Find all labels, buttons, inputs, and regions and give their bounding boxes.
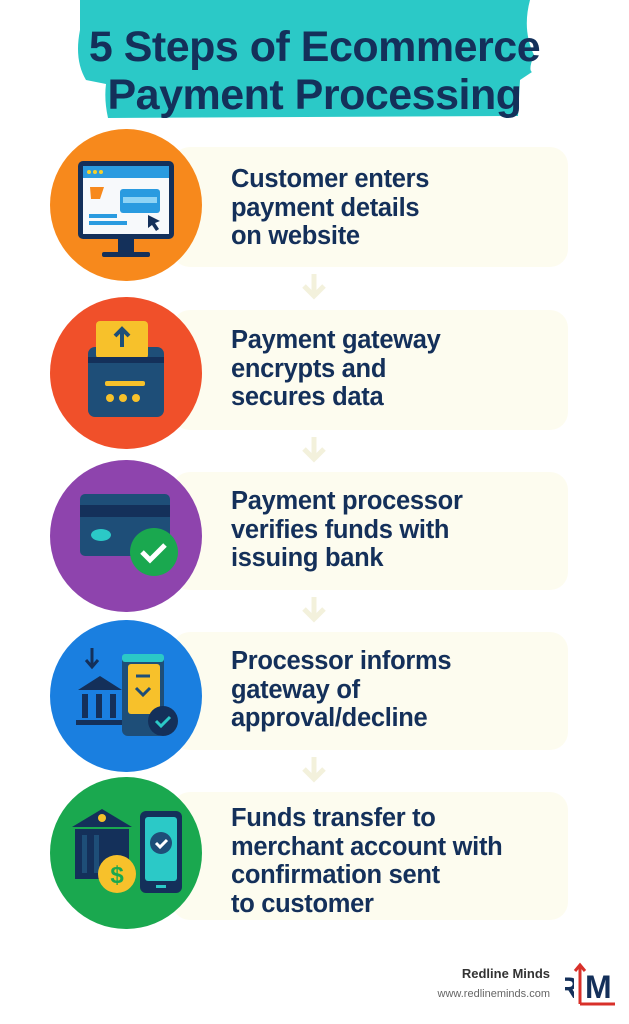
step 2 text xyxy=(231,326,441,411)
arrow 2 xyxy=(302,437,326,462)
step 2 text: encrypts and xyxy=(231,354,386,382)
step 3 text xyxy=(231,487,463,572)
step 1 text: on website xyxy=(231,222,360,250)
step 5 text: merchant account with xyxy=(231,832,502,860)
step 3 card xyxy=(172,472,568,590)
step 5 text: confirmation sent xyxy=(231,861,440,889)
step 4 text: Processor informs xyxy=(231,647,451,675)
icon: computer (step 1) xyxy=(50,129,202,281)
title banner xyxy=(78,0,540,119)
title banner: 5 Steps of Ecommerce xyxy=(89,23,540,71)
icon: card with check (step 3) xyxy=(50,460,202,612)
step 1 text xyxy=(231,165,429,250)
logo: M xyxy=(585,969,612,1005)
step 4 text: gateway of xyxy=(231,676,360,704)
icon: bank coin phone (step 5): $ xyxy=(110,862,124,889)
step 5 text: Funds transfer to xyxy=(231,804,436,832)
step 2 text: secures data xyxy=(231,383,383,411)
step 3 text: issuing bank xyxy=(231,544,383,572)
icon: bank coin phone (step 5) xyxy=(50,777,202,929)
arrow 3 xyxy=(302,597,326,622)
step 3 text: verifies funds with xyxy=(231,516,449,544)
step 5 text xyxy=(231,804,502,918)
footer brand: www.redlineminds.com xyxy=(438,988,550,1000)
icon: card reader (step 2) xyxy=(50,297,202,449)
step 2 text: Payment gateway xyxy=(231,326,441,354)
arrow 1 xyxy=(302,274,326,300)
step 4 text xyxy=(231,647,451,732)
icon: bank and phone (step 4) xyxy=(50,620,202,772)
step 1 text: payment details xyxy=(231,194,419,222)
title banner: Payment Processing xyxy=(107,71,522,119)
step 2 card xyxy=(172,310,568,430)
step 3 text: Payment processor xyxy=(231,487,463,515)
logo xyxy=(565,962,615,1006)
step 4 card xyxy=(172,632,568,750)
step 5 text: to customer xyxy=(231,890,374,918)
arrow 4 xyxy=(302,757,326,782)
step 4 text: approval/decline xyxy=(231,704,427,732)
step 5 card xyxy=(172,792,568,920)
footer brand: Redline Minds xyxy=(462,966,550,981)
step 1 text: Customer enters xyxy=(231,165,429,193)
footer brand xyxy=(438,962,615,1006)
step 1 card xyxy=(172,147,568,267)
